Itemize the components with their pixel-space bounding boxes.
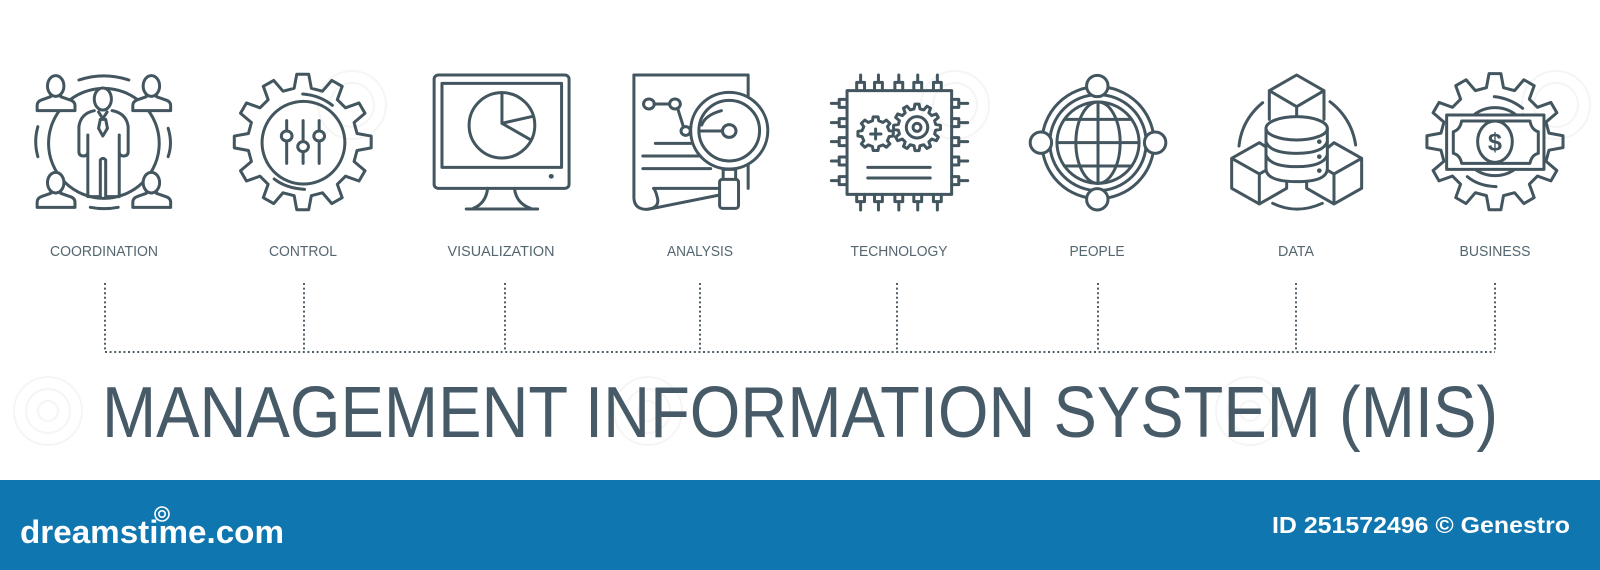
footer bar [0,480,1600,570]
icon: coordination [36,76,171,209]
labels: COORDINATION [50,244,158,260]
image id and credit: ID 251572496 © Genestro [1272,512,1570,538]
labels: BUSINESS [1460,244,1530,260]
labels [50,244,1530,260]
labels: ANALYSIS [667,244,733,260]
labels: TECHNOLOGY [850,244,948,260]
labels: DATA [1278,244,1314,260]
icon: data cubes and database [1232,75,1362,209]
labels: VISUALIZATION [448,244,554,260]
icon: technology chip [831,75,968,210]
icon: people globe [1030,75,1166,210]
logo text: dreamstime.com [20,514,284,550]
logo spiral [155,507,169,521]
icon: control gear [234,74,371,210]
labels: CONTROL [269,244,337,260]
icon: visualization monitor [434,75,569,209]
icon: business gear with banknote [1427,74,1563,210]
labels: PEOPLE [1070,244,1125,260]
icon: business gear with banknote: $ [1488,128,1502,156]
dotted connector bracket [105,283,1495,352]
icon: analysis magnifier [634,75,768,209]
